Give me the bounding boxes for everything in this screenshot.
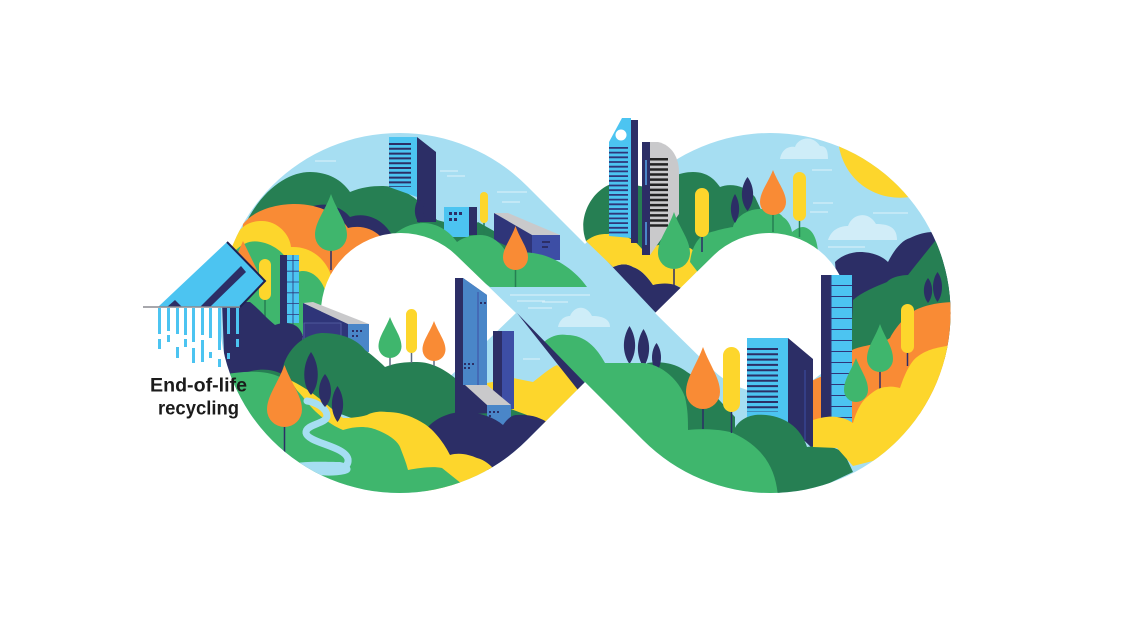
tree: yellow capsule left — [259, 259, 271, 318]
hill: dark green patch — [477, 222, 506, 248]
building: right tall tower — [821, 275, 852, 425]
tree: orange — [422, 321, 446, 366]
tree: green tall — [658, 212, 690, 285]
hill: dark green top right — [583, 172, 775, 262]
hill: dark green right — [850, 241, 960, 360]
tree: yellow capsule lower right — [723, 347, 740, 433]
hill: yellow — [586, 234, 708, 288]
hill: yellow right — [813, 345, 955, 466]
hill: navy left — [222, 302, 303, 380]
tree: green right — [867, 324, 893, 389]
hill: yellow lower-left — [290, 380, 495, 500]
white hole: right lobe — [655, 233, 849, 393]
building: left slim tower — [280, 255, 299, 325]
hill: dark green centre — [240, 333, 527, 430]
label: recycling: recycling — [158, 398, 239, 420]
top-right hills — [583, 172, 818, 313]
top-middle hills — [389, 137, 587, 287]
tree: green right small — [844, 358, 868, 421]
trees: navy leaves far right — [924, 272, 942, 303]
building: top tower — [389, 137, 436, 222]
tree: big orange — [267, 365, 302, 453]
white hole: left lobe — [321, 233, 516, 393]
trees in left hole — [378, 309, 446, 366]
building: small blue block — [444, 207, 477, 237]
hill: dark green behind trees — [647, 362, 735, 440]
trees: navy leaves lower-left — [304, 352, 343, 422]
building: tall tower — [455, 278, 487, 414]
building: grey roof block — [494, 213, 560, 260]
building: short tower — [493, 331, 514, 409]
trees: navy leaves crossing — [624, 326, 661, 372]
tree: orange — [503, 226, 528, 287]
hill: dark green top left — [248, 172, 463, 242]
ground line — [143, 306, 240, 308]
hill: yellow right of crossing — [487, 365, 586, 424]
right-side hills — [813, 232, 951, 423]
hill: orange — [242, 204, 380, 274]
hill: navy lower centre — [428, 412, 550, 470]
hill: navy right — [835, 232, 960, 320]
tree: orange lower right — [686, 347, 720, 429]
tree: green — [378, 317, 402, 366]
tree: yellow capsule — [406, 309, 417, 363]
tree: green top left — [315, 194, 347, 270]
hill: orange sliver — [238, 241, 258, 272]
recycling drips — [158, 308, 239, 367]
hill: navy lower — [606, 260, 681, 313]
building: curved grey tower — [642, 142, 679, 255]
hill: green lower-left — [230, 372, 460, 493]
hill: orange right — [813, 302, 951, 423]
wedge: navy crossing — [517, 313, 587, 390]
tree: yellow capsule — [695, 188, 709, 252]
hill: green crossing — [544, 335, 780, 495]
tree: orange — [760, 170, 786, 232]
infographic: infinity loop city landscape — [143, 118, 951, 493]
top-left hills — [232, 172, 463, 335]
infinity loop sky background — [219, 133, 951, 493]
river — [297, 401, 351, 476]
top-right towers and trees — [609, 118, 806, 285]
hill: green — [390, 223, 587, 287]
hill: navy ridge — [314, 204, 391, 236]
sun — [838, 146, 908, 198]
building: grey roof low block — [465, 385, 511, 426]
hill: green left — [230, 241, 325, 335]
hill: yellow — [232, 221, 331, 289]
tree: yellow capsule — [480, 192, 488, 226]
crossing: lower band — [517, 275, 955, 497]
hill: dark green lower right — [733, 415, 853, 497]
building: tower with circle — [609, 118, 638, 243]
recycling card icon — [158, 242, 265, 307]
label: End-of-life: End-of-life — [150, 376, 247, 396]
trees: navy leaves — [414, 202, 420, 223]
hill: light green — [690, 209, 818, 275]
building: left mid block — [303, 302, 369, 352]
clouds — [558, 139, 897, 327]
trees: navy leaves — [731, 177, 753, 223]
tree: yellow capsule — [793, 172, 806, 237]
lower-left band — [222, 255, 586, 505]
building: lower right block — [747, 338, 813, 449]
tree: yellow capsule right — [901, 304, 914, 366]
